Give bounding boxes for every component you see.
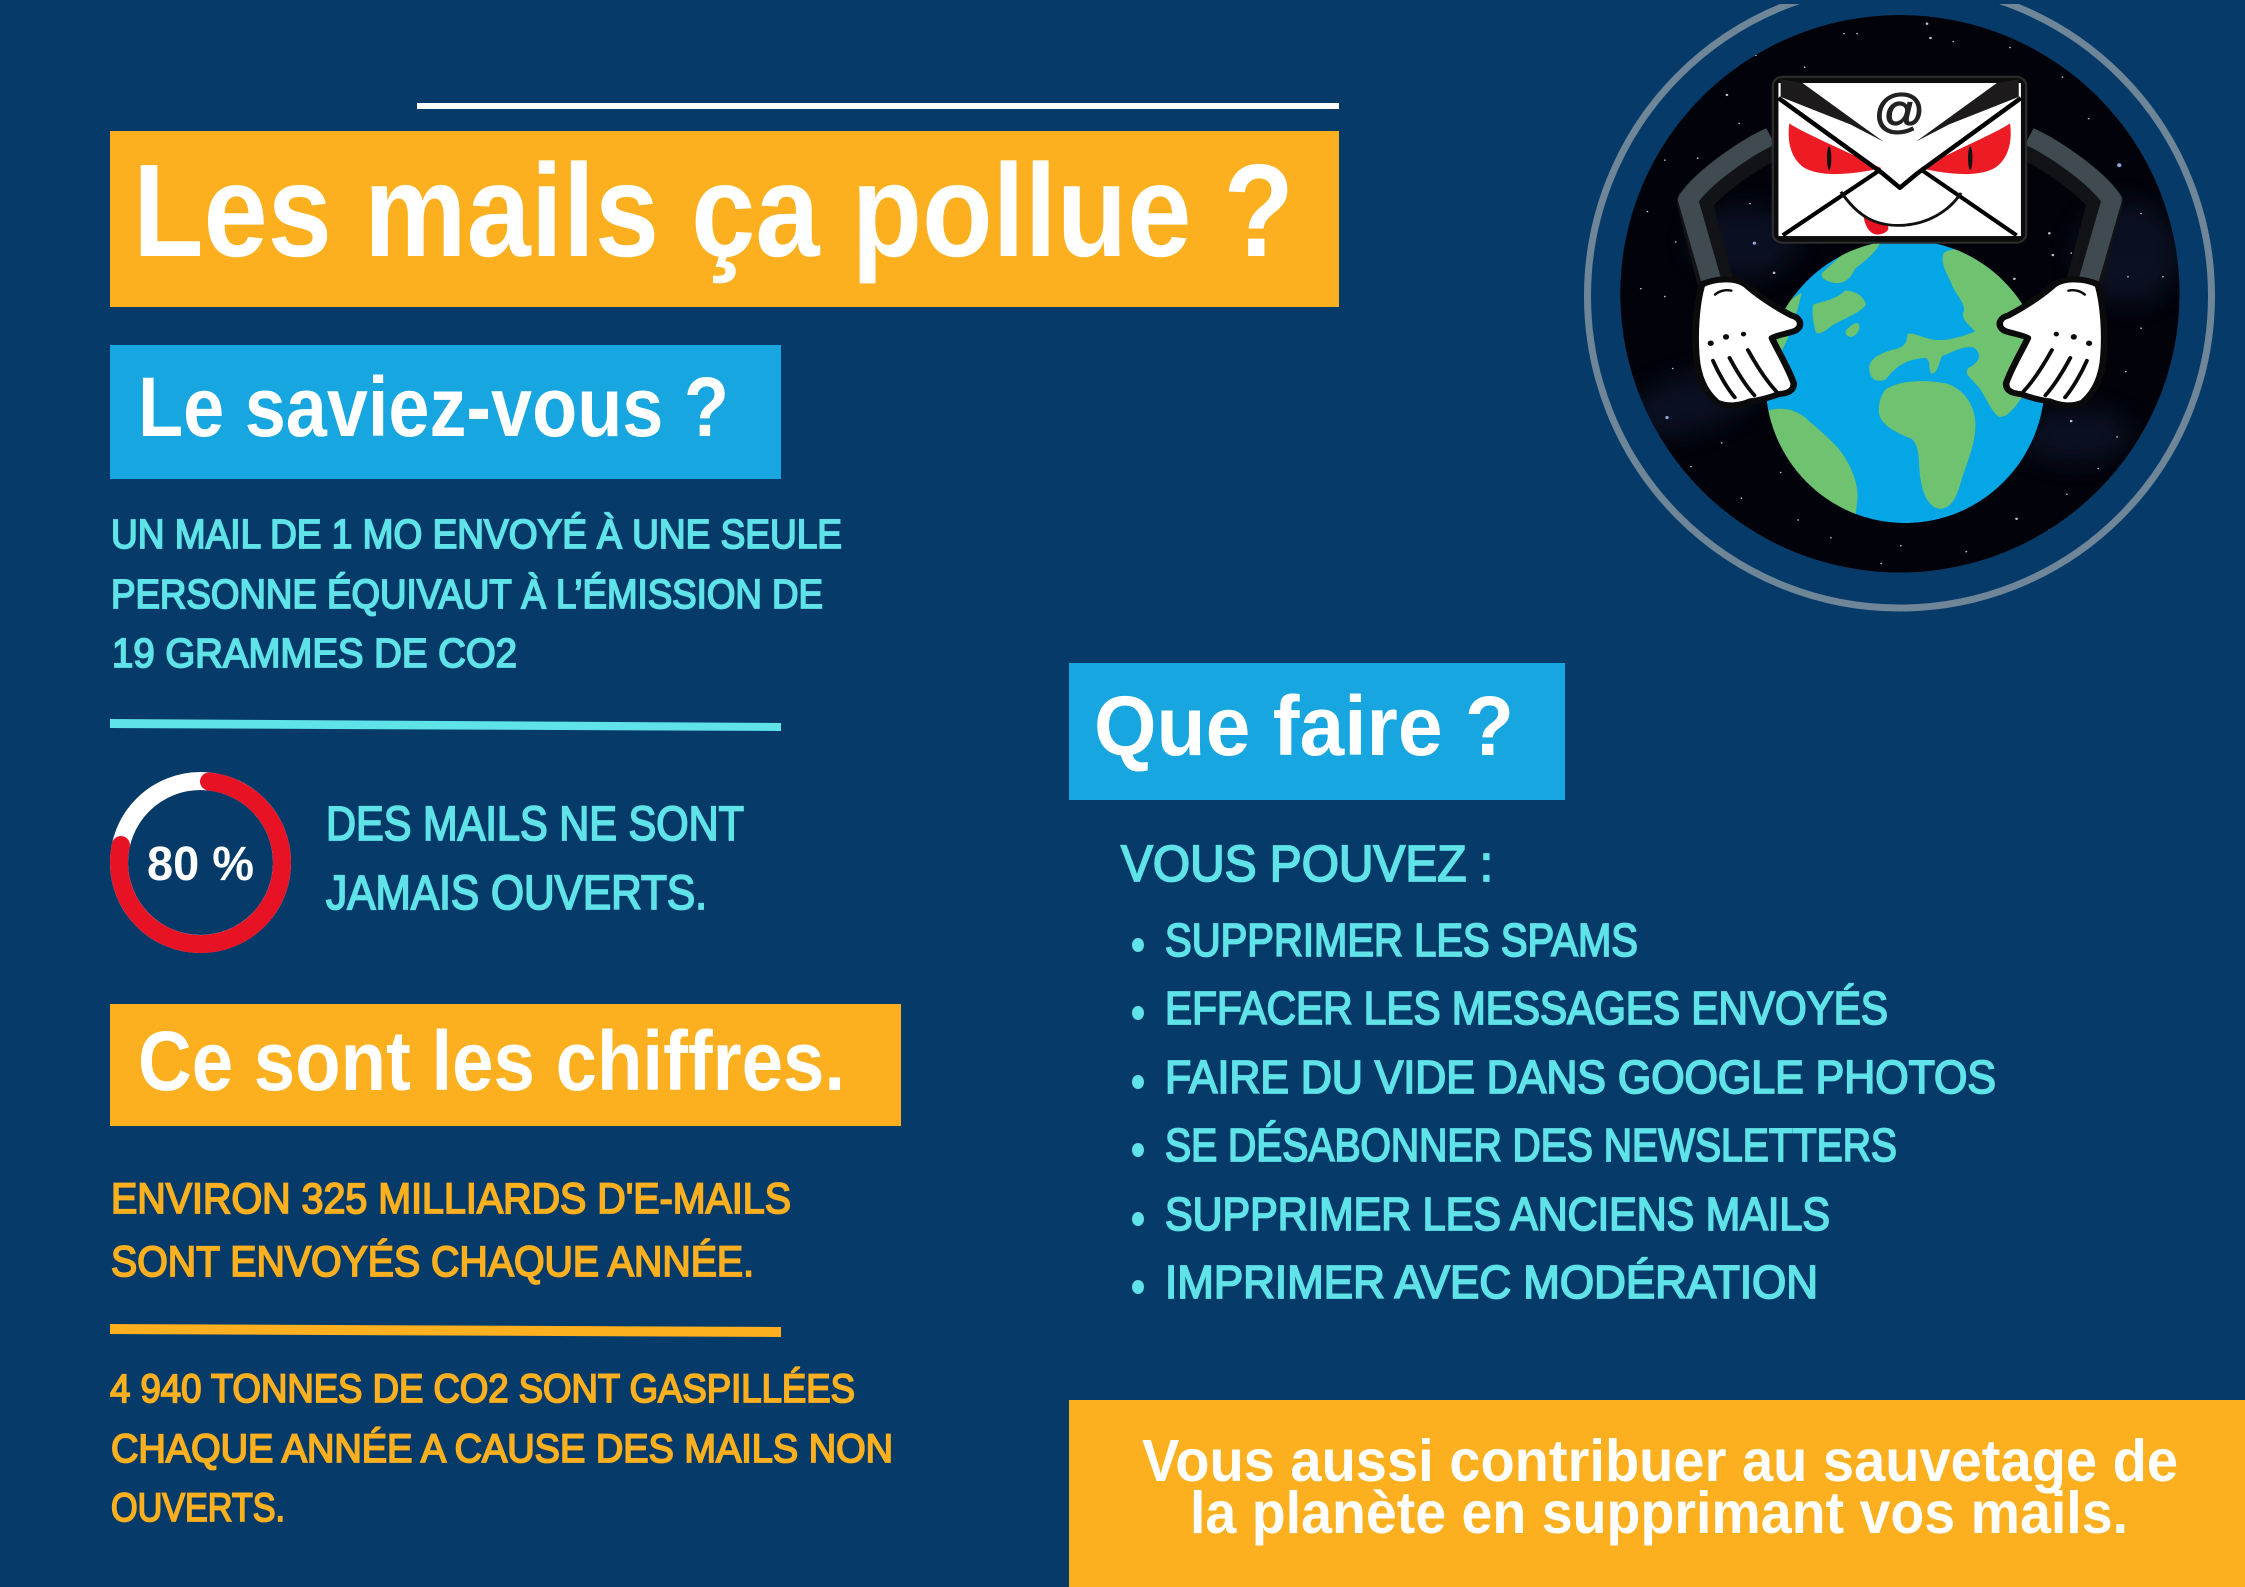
gloves <box>1696 279 2104 405</box>
text block: 4 940 tonnes <box>110 1366 893 1530</box>
icon: emblem of angry envelope holding the Earth <box>1588 0 2212 608</box>
heading: Que faire: Que faire ? <box>1094 679 1514 773</box>
text block: 4 940 tonnes: 4 940 TONNES DE CO2 SONT GASPILLÉES <box>110 1366 855 1411</box>
heading: Le saviez-vous: Le saviez-vous ? <box>138 360 729 454</box>
action list: FAIRE DU VIDE DANS GOOGLE PHOTOS <box>1165 1051 1996 1103</box>
callout banner <box>1069 1400 2245 1587</box>
envelope face <box>1773 77 2026 243</box>
callout banner: la planète en supprimant vos mails. <box>1190 1480 2128 1546</box>
text block: unopened mails: JAMAIS OUVERTS. <box>326 867 707 920</box>
donut chart: 80 %: 80 % <box>147 838 254 891</box>
starry sky disc <box>1611 12 2185 577</box>
text block: 325 milliards: ENVIRON 325 MILLIARDS D'E-MAILS <box>111 1175 791 1223</box>
action list: SUPPRIMER LES SPAMS <box>1165 914 1638 966</box>
text block: 1 Mo fact: PERSONNE ÉQUIVAUT À L’ÉMISSION DE <box>111 571 823 617</box>
action list <box>1132 914 1996 1308</box>
donut chart: 80 % <box>119 781 282 944</box>
heading: Que faire <box>1069 663 1565 800</box>
action list: EFFACER LES MESSAGES ENVOYÉS <box>1165 982 1888 1034</box>
ring <box>1588 0 2212 608</box>
heading: Le saviez-vous <box>110 345 781 479</box>
text block: 1 Mo fact: UN MAIL DE 1 MO ENVOYÉ À UNE SEULE <box>111 511 842 557</box>
text block: unopened mails <box>326 798 744 920</box>
envelope face: @ <box>1874 85 1925 138</box>
text block: unopened mails: DES MAILS NE SONT <box>326 798 744 851</box>
action list: SUPPRIMER LES ANCIENS MAILS <box>1165 1188 1830 1240</box>
text: Vous pouvez: VOUS POUVEZ : <box>1121 835 1493 892</box>
title banner: Les mails ça pollue ? <box>133 137 1294 284</box>
action list: SE DÉSABONNER DES NEWSLETTERS <box>1165 1119 1897 1171</box>
text block: 4 940 tonnes: CHAQUE ANNÉE A CAUSE DES MAILS NON <box>111 1426 893 1471</box>
text block: 325 milliards: SONT ENVOYÉS CHAQUE ANNÉE. <box>111 1238 754 1286</box>
action list: IMPRIMER AVEC MODÉRATION <box>1165 1256 1818 1308</box>
heading: Ce sont les chiffres: Ce sont les chiffres. <box>138 1014 845 1108</box>
text block: 1 Mo fact: 19 GRAMMES DE CO2 <box>112 630 517 676</box>
arms <box>1688 136 2112 281</box>
text block: 4 940 tonnes: OUVERTS. <box>111 1486 285 1530</box>
text block: 325 milliards <box>111 1175 791 1286</box>
text block: 1 Mo fact <box>111 511 842 676</box>
callout banner: Vous aussi contribuer au sauvetage de <box>1142 1428 2178 1494</box>
globe <box>1752 240 2054 523</box>
